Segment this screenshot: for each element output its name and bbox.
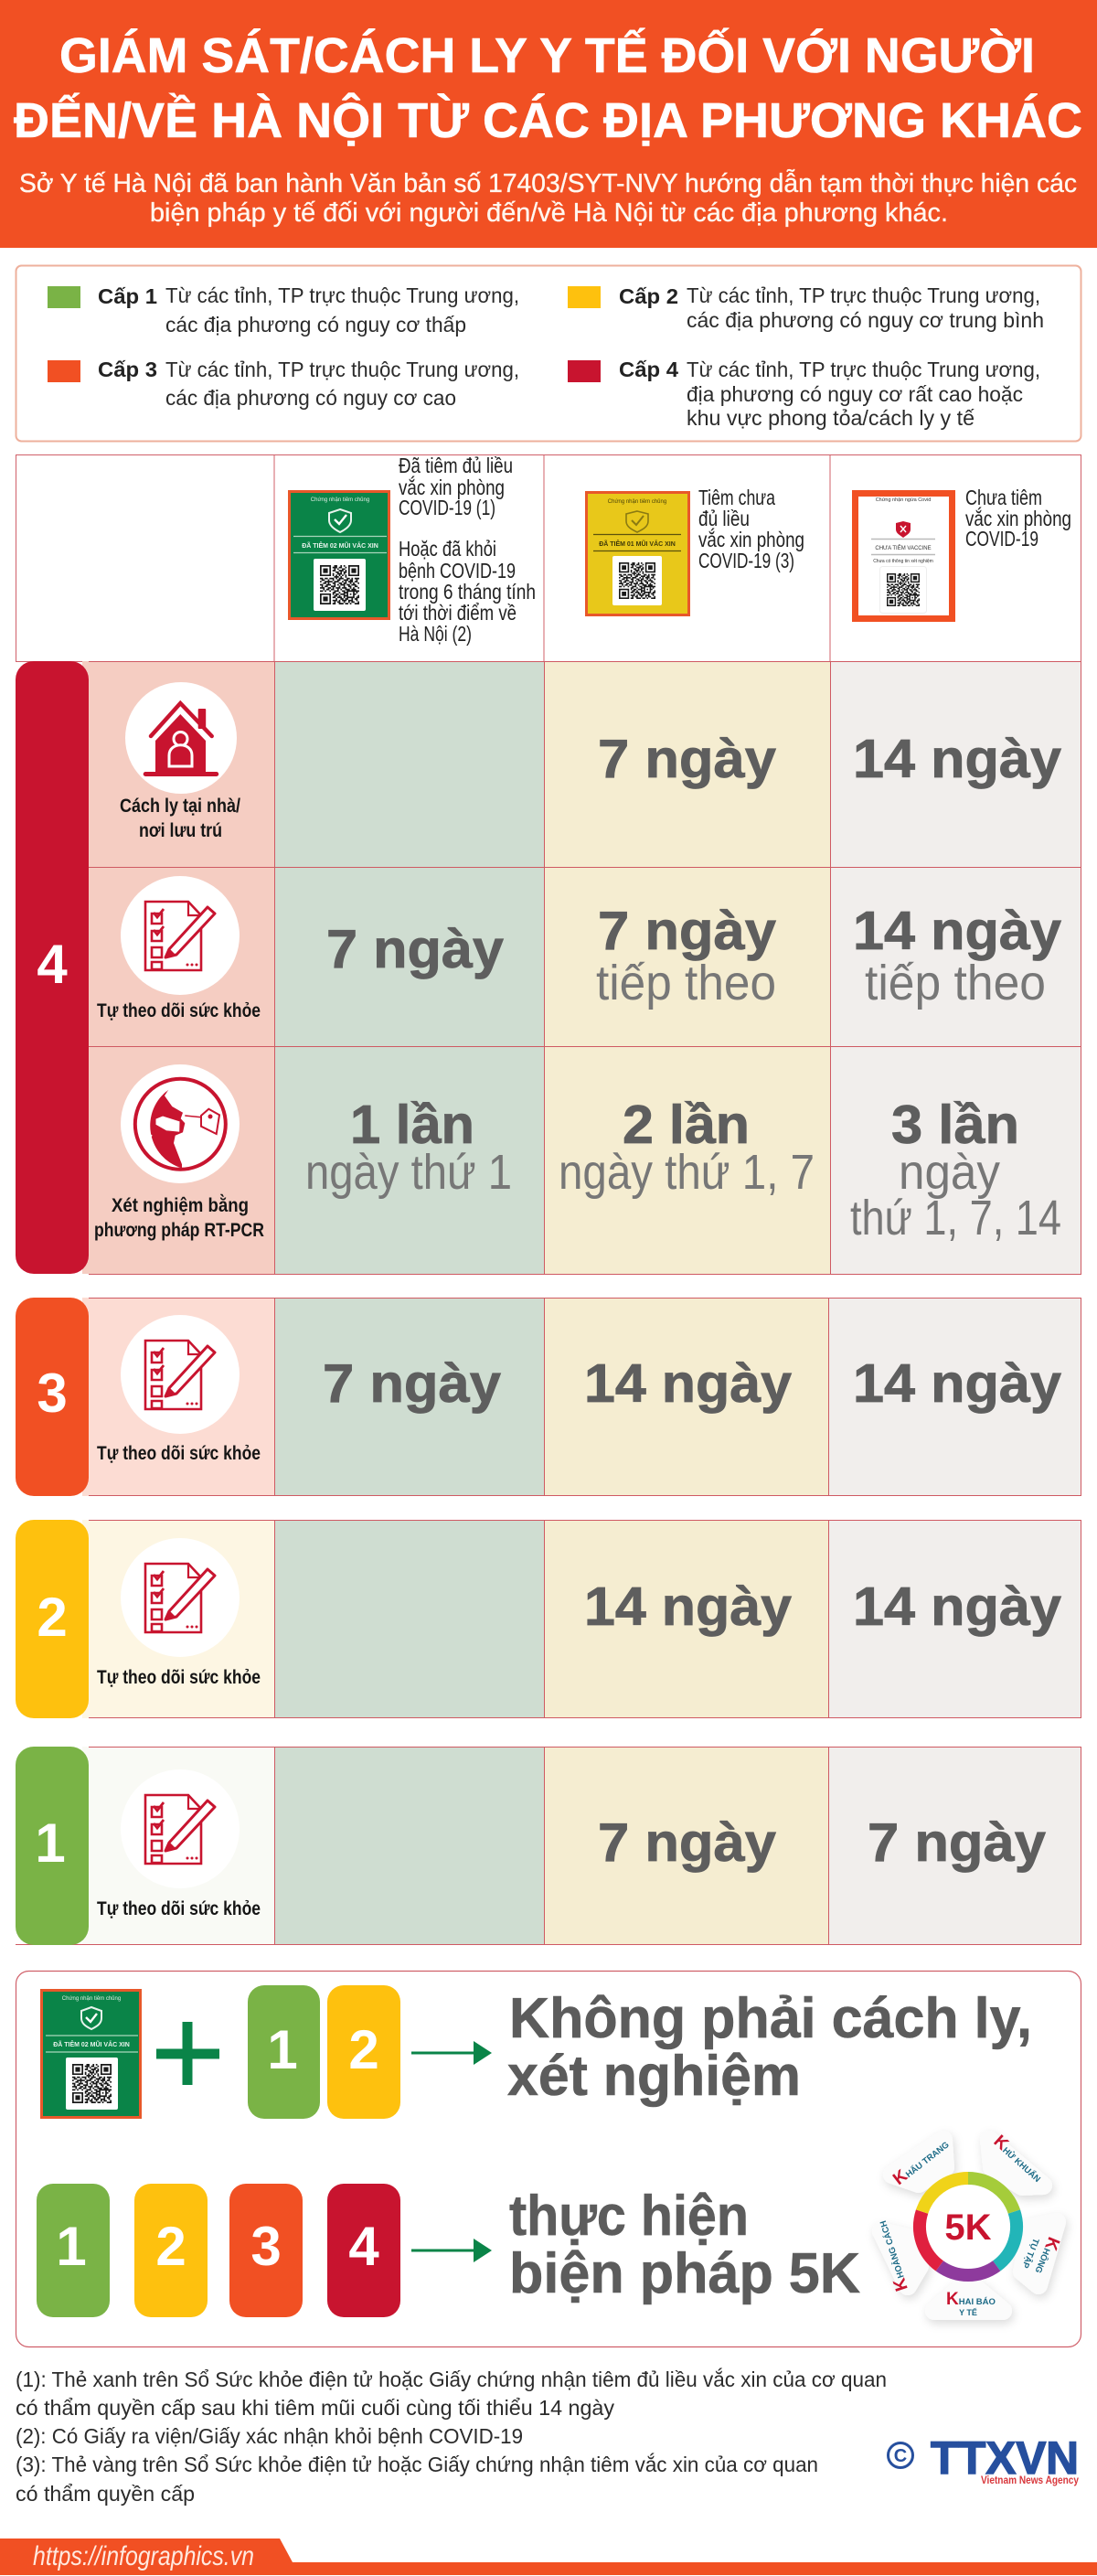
- legend: level 2: Từ các tỉnh, TP trực thuộc Trung ương,: [687, 283, 1040, 307]
- legend: level 1: [48, 283, 519, 337]
- panel: table column headers: [16, 454, 1081, 662]
- text: partially vaccinated: Tiêm chưa: [698, 486, 775, 509]
- text: partially vaccinated: vắc xin phòng: [698, 528, 804, 551]
- icon: yellow vaccine card: [587, 492, 689, 615]
- value: test grey: ngày: [899, 1145, 1000, 1200]
- text: unvaccinated: [965, 486, 1071, 550]
- footnotes: (3): Thẻ vàng trên Sổ Sức khỏe điện tử hoặc Giấy chứng nhận tiêm vắc xin của cơ quan: [16, 2453, 818, 2476]
- legend: level 1: Cấp 1: [98, 284, 157, 308]
- icon: 5K wheel: [871, 2132, 1063, 2317]
- badges: levels 1 and 2: [248, 1985, 400, 2119]
- text: fully vaccinated: tới thời điểm về: [399, 601, 517, 625]
- value: home quarantine yellow: 7 ngày: [598, 729, 776, 789]
- values: level 3: 7 ngày: [323, 1353, 501, 1414]
- values: level 2: [584, 1577, 1061, 1637]
- value: monitoring yellow: tiếp theo: [596, 956, 776, 1010]
- footnotes: có thẩm quyền cấp sau khi tiêm mũi cuối cùng tối thiểu 14 ngày: [16, 2396, 614, 2420]
- text: apply 5K: thực hiện: [509, 2185, 749, 2248]
- footnotes: (1): Thẻ xanh trên Sổ Sức khỏe điện tử hoặc Giấy chứng nhận tiêm đủ liều vắc xin của cơ quan: [16, 2368, 887, 2391]
- value: test yellow: [559, 1095, 815, 1200]
- level badge 2: [16, 1520, 89, 1718]
- header banner: [0, 0, 1097, 248]
- row: home quarantine: [120, 682, 1061, 841]
- icon: 5K wheel: KHOẢNG CÁCH: [871, 2218, 912, 2293]
- text: no quarantine: xét nghiệm: [507, 2045, 801, 2108]
- values: level 3: 14 ngày: [584, 1353, 792, 1414]
- label: RT-PCR testing: Xét nghiệm bằng: [112, 1194, 249, 1216]
- legend: level 2: [568, 283, 1044, 332]
- icon: green vaccine card: Chứng nhận tiêm chủng: [311, 497, 369, 503]
- value: monitoring grey: [853, 901, 1061, 1010]
- icon: green card small: [42, 1990, 141, 2118]
- value: monitoring yellow: 7 ngày: [598, 901, 776, 961]
- text: partially vaccinated: [698, 486, 804, 572]
- label: self monitoring: Tự theo dõi sức khỏe: [97, 1000, 261, 1021]
- icon: white uncertified card: Chưa có thông tin xét nghiệm: [873, 559, 933, 564]
- legend: level 4: Cấp 4: [619, 358, 678, 381]
- subtitle: Sở Y tế Hà Nội đã ban hành Văn bản số 17403/SYT-NVY hướng dẫn tạm thời thực hiện các: [19, 168, 1077, 198]
- badges: levels 1 to 4: 1: [56, 2216, 87, 2277]
- panel: level 1 row: [16, 1747, 1081, 1945]
- text: fully vaccinated: vắc xin phòng: [399, 476, 505, 499]
- value: monitoring grey: tiếp theo: [865, 956, 1046, 1010]
- level badge 1: [16, 1747, 89, 1945]
- badges: levels 1 to 4: 2: [155, 2216, 186, 2277]
- panel: risk level legend: [16, 265, 1081, 441]
- value: monitoring yellow: [596, 901, 776, 1010]
- values: level 1: 7 ngày: [598, 1812, 776, 1873]
- text: unvaccinated: COVID-19: [965, 527, 1038, 550]
- text: fully vaccinated: [399, 454, 536, 646]
- logo: TTXVN: C: [894, 2446, 907, 2466]
- values: level 2: 14 ngày: [853, 1577, 1061, 1637]
- value: monitoring green: 7 ngày: [326, 919, 504, 979]
- footnotes: (2): Có Giấy ra viện/Giấy xác nhận khỏi bệnh COVID-19: [16, 2424, 523, 2448]
- icon: 5K wheel: TỤ TẬP: [1019, 2237, 1041, 2271]
- icon: 5K wheel: KHÔNG: [1031, 2234, 1063, 2277]
- legend: level 4: [568, 358, 1040, 430]
- level badge 4: 4: [37, 934, 68, 995]
- level badge 3: [16, 1298, 89, 1496]
- icon: home quarantine: [125, 682, 237, 794]
- value: test grey: [850, 1095, 1061, 1245]
- values: level 2: 14 ngày: [584, 1577, 792, 1637]
- title: [14, 28, 1082, 148]
- icon: white uncertified card: [856, 494, 953, 618]
- legend: level 2: Cấp 2: [619, 284, 678, 308]
- text: fully vaccinated: bệnh COVID-19: [399, 559, 516, 583]
- values: level 3: [323, 1353, 1061, 1414]
- title: ĐẾN/VỀ HÀ NỘI TỪ CÁC ĐỊA PHƯƠNG KHÁC: [14, 92, 1082, 148]
- arrow: [411, 2041, 492, 2065]
- icon: 5K wheel: 5K: [944, 2207, 992, 2248]
- text: partially vaccinated: đủ liều: [698, 507, 750, 530]
- legend: level 3: Cấp 3: [98, 358, 157, 381]
- legend: level 4: khu vực phong tỏa/cách ly y tế: [687, 406, 975, 430]
- level badge 3: 3: [37, 1363, 68, 1424]
- subtitle: [19, 168, 1077, 228]
- legend: level 4: địa phương có nguy cơ rất cao hoặc: [687, 382, 1023, 406]
- value: test green: 1 lần: [350, 1095, 474, 1155]
- level badge 1: 1: [35, 1812, 66, 1874]
- arrow: [411, 2239, 492, 2262]
- icon: yellow vaccine card: Chứng nhận tiêm chủng: [608, 498, 666, 505]
- icon: yellow vaccine card: ĐÃ TIÊM 01 MŨI VẮC XIN: [599, 540, 676, 548]
- legend: level 3: các địa phương có nguy cơ cao: [165, 386, 456, 410]
- footnotes: [16, 2368, 887, 2506]
- legend: level 4: Từ các tỉnh, TP trực thuộc Trung ương,: [687, 358, 1040, 381]
- legend: level 3: Từ các tỉnh, TP trực thuộc Trung ương,: [165, 358, 519, 381]
- icon: 5K wheel: Y TẾ: [959, 2308, 977, 2317]
- label: self monitoring: Tự theo dõi sức khỏe: [97, 1667, 261, 1688]
- icon: white uncertified card: CHƯA TIÊM VACCINE: [875, 544, 932, 551]
- values: level 1: 7 ngày: [868, 1812, 1046, 1873]
- footer bar: [0, 2539, 1097, 2575]
- row: RT-PCR testing: [94, 1064, 1061, 1245]
- label: home quarantine: Cách ly tại nhà/: [120, 796, 240, 817]
- icon: 5K wheel: KHẨU TRANG: [889, 2134, 953, 2189]
- label: home quarantine: [120, 796, 240, 841]
- value: test yellow: 2 lần: [623, 1095, 750, 1155]
- value: test grey: thứ 1, 7, 14: [850, 1191, 1061, 1245]
- value: test green: ngày thứ 1: [305, 1145, 512, 1200]
- text: fully vaccinated: Đã tiêm đủ liều: [399, 454, 513, 477]
- icon: checklist: [121, 1538, 240, 1657]
- text: apply 5K: biện pháp 5K: [509, 2242, 860, 2305]
- text: no quarantine: Không phải cách ly,: [509, 1987, 1032, 2050]
- level badge 2: 2: [37, 1587, 68, 1648]
- footer bar: https://infographics.vn: [33, 2541, 254, 2571]
- text: fully vaccinated: COVID-19 (1): [399, 496, 495, 519]
- label: home quarantine: nơi lưu trú: [139, 820, 222, 841]
- value: test grey: 3 lần: [891, 1095, 1019, 1155]
- text: fully vaccinated: Hà Nội (2): [399, 622, 472, 646]
- badges: levels 1 and 2: 1: [267, 2019, 298, 2080]
- level badge 4: [16, 661, 89, 1274]
- text: unvaccinated: Chưa tiêm: [965, 486, 1042, 509]
- logo: TTXVN: Vietnam News Agency: [981, 2474, 1079, 2486]
- icon: checklist: [121, 1315, 240, 1434]
- badges: levels 1 and 2: 2: [348, 2019, 379, 2080]
- text: fully vaccinated: Hoặc đã khỏi: [399, 537, 496, 561]
- text: partially vaccinated: COVID-19 (3): [698, 549, 794, 572]
- logo: TTXVN: TTXVN: [931, 2432, 1079, 2484]
- title: GIÁM SÁT/CÁCH LY Y TẾ ĐỐI VỚI NGƯỜI: [59, 28, 1035, 83]
- panel: level 3 row: [16, 1298, 1081, 1496]
- legend: level 1: các địa phương có nguy cơ thấp: [165, 313, 466, 337]
- legend: level 1: Từ các tỉnh, TP trực thuộc Trung ương,: [165, 283, 519, 307]
- text: no quarantine: [507, 1987, 1032, 2108]
- text: fully vaccinated: trong 6 tháng tính: [399, 580, 536, 604]
- icon: green vaccine card: ĐÃ TIÊM 02 MŨI VẮC XIN: [302, 541, 378, 550]
- text: apply 5K: [509, 2185, 860, 2305]
- panel: level 2 row: [16, 1520, 1081, 1718]
- footnotes: có thẩm quyền cấp: [16, 2482, 195, 2506]
- icon: checklist: [121, 1769, 240, 1888]
- badges: levels 1 to 4: 3: [250, 2216, 282, 2277]
- icon: white uncertified card: Chứng nhận ngừa Covid: [876, 497, 931, 503]
- value: test yellow: ngày thứ 1, 7: [559, 1145, 815, 1200]
- icon: checklist: [121, 876, 240, 995]
- values: level 3: 14 ngày: [853, 1353, 1061, 1414]
- icon: plus: [156, 2022, 219, 2085]
- value: home quarantine grey: 14 ngày: [853, 729, 1061, 789]
- legend: level 3: [48, 358, 519, 410]
- value: monitoring grey: 14 ngày: [853, 901, 1061, 961]
- icon: green card small: Chứng nhận tiêm chủng: [62, 1995, 121, 2002]
- badges: levels 1 to 4: 4: [348, 2216, 379, 2277]
- value: test green: [305, 1095, 512, 1200]
- subtitle: biện pháp y tế đối với người đến/về Hà Nội từ các địa phương khác.: [150, 198, 948, 228]
- legend: level 2: các địa phương có nguy cơ trung bình: [687, 308, 1044, 332]
- icon: 5K wheel: KHỬ KHUẨN: [990, 2132, 1047, 2186]
- label: RT-PCR testing: phương pháp RT-PCR: [94, 1220, 264, 1241]
- values: level 1: [598, 1812, 1046, 1873]
- badges: levels 1 to 4: [37, 2184, 400, 2317]
- icon: green vaccine card: [289, 492, 389, 618]
- icon: green card small: ĐÃ TIÊM 02 MŨI VẮC XIN: [53, 2040, 130, 2048]
- icon: nasal swab test: [121, 1064, 240, 1183]
- panel: summary rules: [16, 1972, 1081, 2346]
- label: self monitoring: Tự theo dõi sức khỏe: [97, 1443, 261, 1464]
- label: RT-PCR testing: [94, 1194, 264, 1241]
- row: self monitoring: [97, 876, 1061, 1021]
- text: unvaccinated: vắc xin phòng: [965, 507, 1071, 530]
- panel: level 4 rows: [16, 661, 1081, 1275]
- label: self monitoring: Tự theo dõi sức khỏe: [97, 1898, 261, 1919]
- icon: 5K wheel: KHAI BÁO: [946, 2290, 996, 2309]
